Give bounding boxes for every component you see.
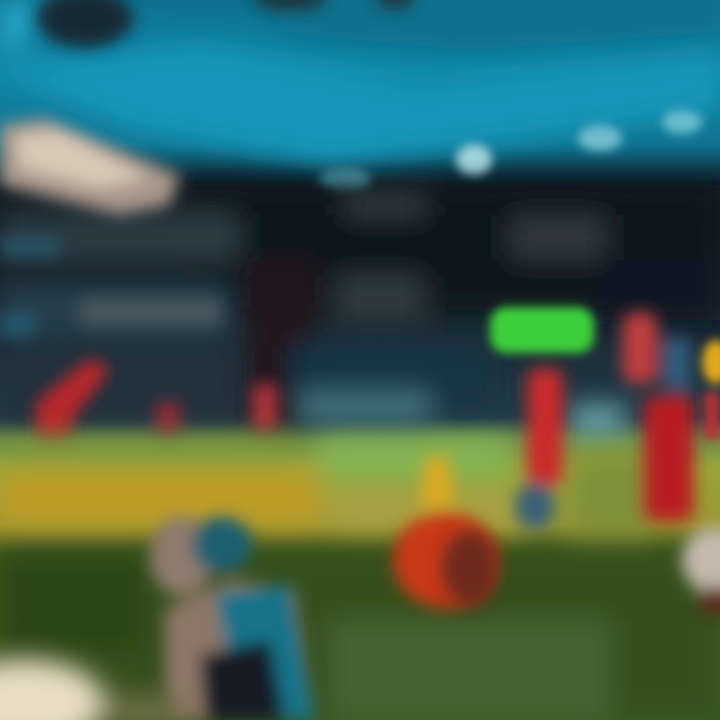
red player right [622,312,694,521]
upper stands [0,185,720,435]
field [0,438,720,720]
bright foreground glare [0,659,185,720]
red player centre [515,368,563,530]
green sign [490,307,594,353]
yellow figure at right edge [702,340,720,440]
dark roof openings [37,0,415,48]
right foreground ball [682,526,720,614]
foreground spectator [150,516,315,720]
orange foreground figure [393,455,498,608]
canopy roof [0,0,720,192]
distant red figures [36,358,278,440]
roof lights [319,110,702,192]
bright stand patch [0,118,180,215]
